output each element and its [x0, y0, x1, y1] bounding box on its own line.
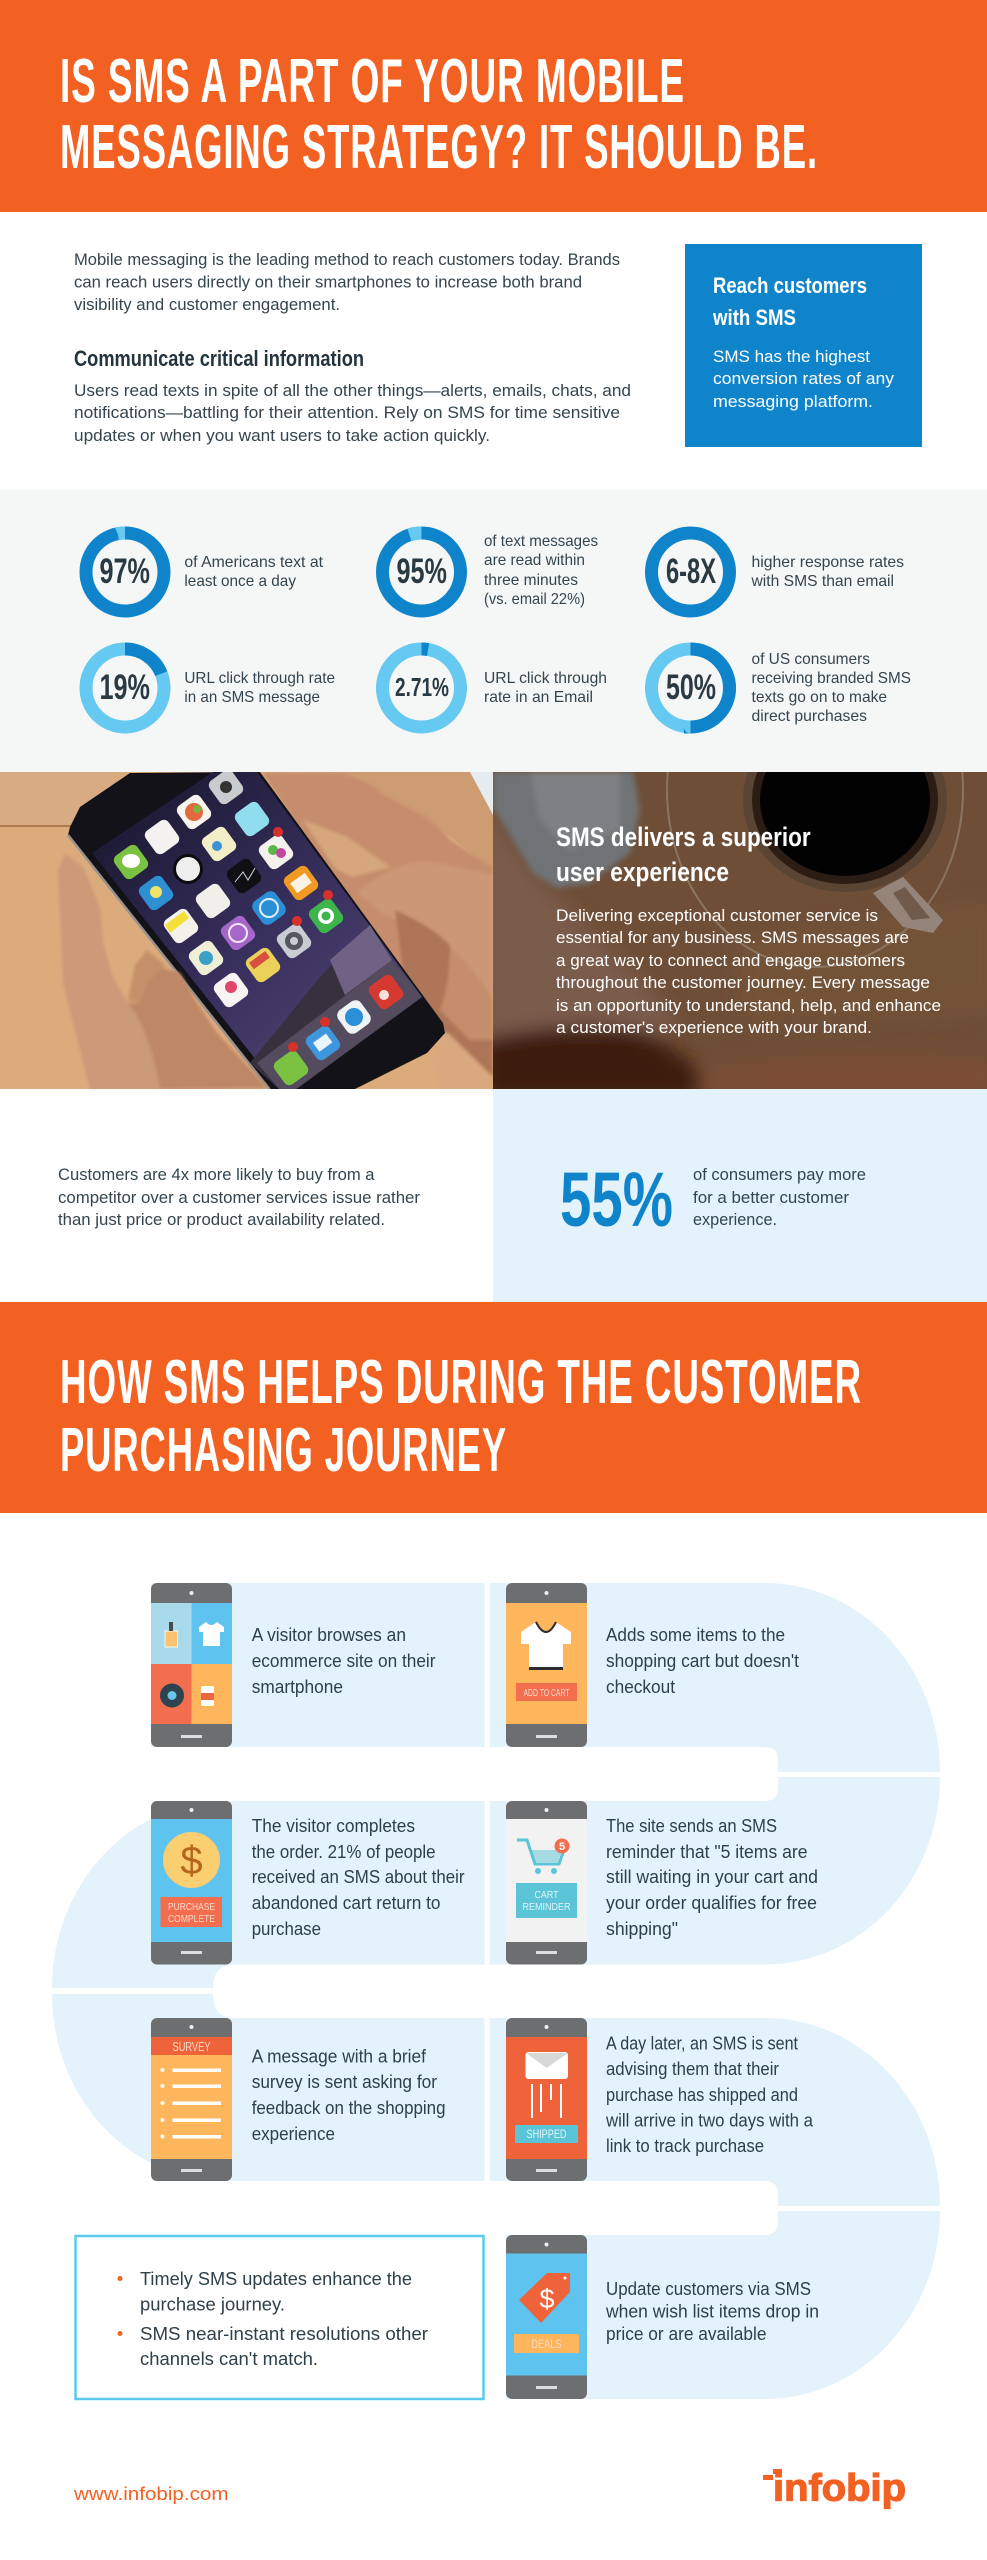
stat: 6-8X: with SMS than email: [751, 573, 894, 590]
intro text block: visibility and customer engagement.: [74, 296, 340, 314]
body text: essential for any business. SMS messages are: [556, 928, 909, 947]
callout: key takeaways: [76, 2236, 484, 2399]
icon: phone add to cart: ADD TO CART: [524, 1688, 570, 1699]
icon: phone deals: [506, 2235, 587, 2399]
stat: 95%: [372, 523, 598, 621]
icon: phone shipped: SHIPPED: [526, 2127, 567, 2141]
step 5: survey: [151, 2018, 446, 2181]
stat: 50%: [652, 649, 911, 727]
text: customers 4x more likely: competitor over a customer services issue rather: [58, 1189, 420, 1207]
icon: phone purchase complete: PURCHASE: [168, 1902, 215, 1913]
step 4: SMS reminder: The site sends an SMS: [606, 1816, 777, 1836]
icon: phone cart reminder: 5: [559, 1841, 565, 1853]
panel: 55% stat: of consumers pay more: [693, 1166, 866, 1184]
step 1: visitor browses: smartphone: [252, 1677, 343, 1697]
stat: 19%: in an SMS message: [184, 689, 320, 706]
critical information text: updates or when you want users to take action quickly.: [74, 427, 490, 445]
stat: 19%: [86, 649, 335, 727]
body text: [556, 906, 941, 1037]
step 6: shipped: will arrive in two days with a: [605, 2110, 814, 2130]
intro text block: can reach users directly on their smartphones to increase both brand: [74, 274, 582, 292]
text: customers 4x more likely: [58, 1166, 420, 1229]
text: customers 4x more likely: Customers are 4x more likely to buy from a: [58, 1166, 375, 1184]
panel: 55% stat: [493, 1089, 987, 1302]
heading: user experience: [556, 857, 729, 887]
critical information text: Users read texts in spite of all the other things—alerts, emails, chats, and: [74, 382, 631, 400]
stat: 6-8X: 6-8X: [666, 552, 716, 591]
stat: 50%: direct purchases: [752, 708, 867, 725]
step 2: adds to cart: checkout: [606, 1677, 675, 1697]
icon: phone survey: [151, 2018, 232, 2181]
stat: 97%: 97%: [100, 552, 150, 591]
icon: phone purchase complete: $: [180, 1839, 203, 1883]
logo: infobip: infobip: [773, 2468, 906, 2510]
stat: 2.71%: 2.71%: [395, 672, 449, 702]
step 2: adds to cart: Adds some items to the: [606, 1625, 785, 1645]
callout: key takeaways: purchase journey.: [140, 2294, 285, 2314]
phone screen: [92, 772, 422, 1090]
step 2: adds to cart: shopping cart but doesn't: [606, 1651, 799, 1671]
step 5: survey: survey is sent asking for: [252, 2072, 437, 2092]
icon: phone with products: [151, 1583, 232, 1747]
stat: 95%: of text messages: [484, 533, 598, 550]
panel: 55% stat: 55%: [560, 1157, 673, 1243]
step 1: visitor browses: A visitor browses an: [252, 1625, 406, 1645]
step 4: SMS reminder: still waiting in your cart and: [606, 1867, 818, 1887]
app icons: [111, 767, 406, 1088]
phone body: [68, 772, 445, 1090]
stat: 95%: three minutes: [484, 572, 578, 589]
stat: 95%: (vs. email 22%): [484, 591, 585, 608]
right hand: [262, 772, 493, 1089]
critical information text: notifications—battling for their attention. Rely on SMS for time sensitive: [74, 404, 620, 422]
step 6: shipped: link to track purchase: [606, 2136, 764, 2156]
callout: key takeaways: channels can't match.: [140, 2349, 318, 2369]
panel: reach customers with SMS: Reach customers: [713, 273, 867, 298]
intro text block: [74, 251, 620, 314]
step 3: order completed: [151, 1801, 464, 1964]
step 3: order completed: abandoned cart return to: [252, 1893, 440, 1913]
text: customers 4x more likely: than just price or product availability related.: [58, 1211, 385, 1229]
step 7: wish list deals: [506, 2235, 819, 2399]
step 7: wish list deals: price or are available: [606, 2324, 766, 2344]
photo: hands holding smartphone: [0, 767, 493, 1090]
heading: [556, 822, 811, 887]
step 4: SMS reminder: your order qualifies for free: [606, 1893, 817, 1913]
body text: Delivering exceptional customer service is: [556, 906, 878, 925]
step 5: survey: experience: [252, 2124, 335, 2144]
icon: phone add to cart: [506, 1583, 587, 1747]
icon: phone purchase complete: [151, 1801, 232, 1964]
section title: PURCHASING JOURNEY: [60, 1416, 507, 1485]
footer url: www.infobip.com: [73, 2483, 228, 2504]
panel: reach customers with SMS: with SMS: [712, 305, 796, 330]
section title: [60, 1348, 862, 1485]
stat: 97%: [79, 526, 324, 618]
step 1: visitor browses: ecommerce site on their: [252, 1651, 436, 1671]
left hand: [58, 853, 270, 1090]
step 3: order completed: received an SMS about their: [252, 1867, 464, 1887]
step 4: SMS reminder: shipping": [606, 1919, 678, 1939]
heading: SMS delivers a superior: [556, 822, 811, 852]
section banner: purchasing journey: [0, 1302, 987, 1513]
step 2: adds to cart: [506, 1583, 799, 1747]
journey path background: [52, 1583, 940, 2399]
icon: phone cart reminder: CART: [534, 1890, 558, 1901]
callout: key takeaways: Timely SMS updates enhance the: [140, 2269, 412, 2289]
header banner: [0, 0, 987, 212]
icon: phone cart reminder: [506, 1801, 587, 1964]
stat: 50%: 50%: [666, 668, 716, 707]
step 5: survey: A message with a brief: [252, 2046, 427, 2066]
icon: phone cart reminder: REMINDER: [522, 1902, 570, 1913]
step 3: order completed: The visitor completes: [252, 1816, 415, 1836]
step 5: survey: feedback on the shopping: [252, 2098, 446, 2118]
stat: 50%: receiving branded SMS: [752, 670, 911, 687]
body text: a customer's experience with your brand.: [556, 1018, 872, 1037]
step 3: order completed: purchase: [252, 1919, 321, 1939]
step 6: shipped: [506, 2018, 814, 2181]
stat: 95%: are read within: [484, 552, 585, 569]
stat: 97%: of Americans text at: [184, 554, 324, 571]
stat: 2.71%: [382, 649, 607, 727]
step 1: visitor browses: [151, 1583, 436, 1747]
step 6: shipped: advising them that their: [606, 2059, 779, 2079]
step 4: SMS reminder: reminder that "5 items are: [606, 1842, 808, 1862]
step 4: SMS reminder: [506, 1801, 818, 1964]
stat: 50%: texts go on to make: [752, 689, 887, 706]
stat: 19%: URL click through rate: [184, 670, 335, 687]
panel: reach customers with SMS: [685, 244, 922, 447]
step 6: shipped: purchase has shipped and: [606, 2085, 798, 2105]
panel: reach customers with SMS: SMS has the highest: [713, 348, 870, 366]
stat: 2.71%: rate in an Email: [484, 689, 593, 706]
main title: [60, 47, 818, 182]
stat: 19%: 19%: [100, 668, 150, 707]
critical information text: [74, 382, 631, 445]
step 7: wish list deals: Update customers via SMS: [606, 2279, 811, 2299]
panel: SMS delivers a superior user experience (photo with overlay): [493, 772, 987, 1089]
step 6: shipped: A day later, an SMS is sent: [606, 2034, 798, 2054]
panel: 55% stat: for a better customer: [693, 1189, 850, 1207]
stat: 50%: of US consumers: [752, 651, 870, 668]
panel: statistics: [0, 490, 987, 772]
icon: phone purchase complete: COMPLETE: [168, 1914, 215, 1925]
stat: 6-8X: [652, 533, 904, 611]
body text: is an opportunity to understand, help, and enhance: [556, 996, 941, 1015]
step 7: wish list deals: when wish list items drop in: [605, 2302, 819, 2322]
callout: key takeaways: SMS near-instant resolutions other: [140, 2324, 428, 2344]
icon: phone survey: SURVEY: [172, 2039, 211, 2054]
panel: reach customers with SMS: messaging platform.: [713, 393, 873, 411]
body text: a great way to connect and engage customers: [556, 951, 905, 970]
stat: 95%: 95%: [396, 552, 447, 591]
icon: phone deals: $: [539, 2284, 555, 2314]
step 3: order completed: the order. 21% of people: [252, 1842, 436, 1862]
panel: reach customers with SMS: conversion rates of any: [713, 370, 895, 388]
icon: phone deals: DEALS: [532, 2337, 562, 2351]
icon: phone shipped: [506, 2018, 587, 2181]
intro text block: Mobile messaging is the leading method to reach customers today. Brands: [74, 251, 620, 269]
body text: throughout the customer journey. Every message: [556, 973, 930, 992]
stat: 97%: least once a day: [184, 573, 296, 590]
stat: 2.71%: URL click through: [484, 670, 607, 687]
panel: 55% stat: experience.: [693, 1211, 777, 1229]
heading: communicate critical information: Communicate critical information: [74, 346, 364, 371]
stat: 6-8X: higher response rates: [752, 554, 904, 571]
